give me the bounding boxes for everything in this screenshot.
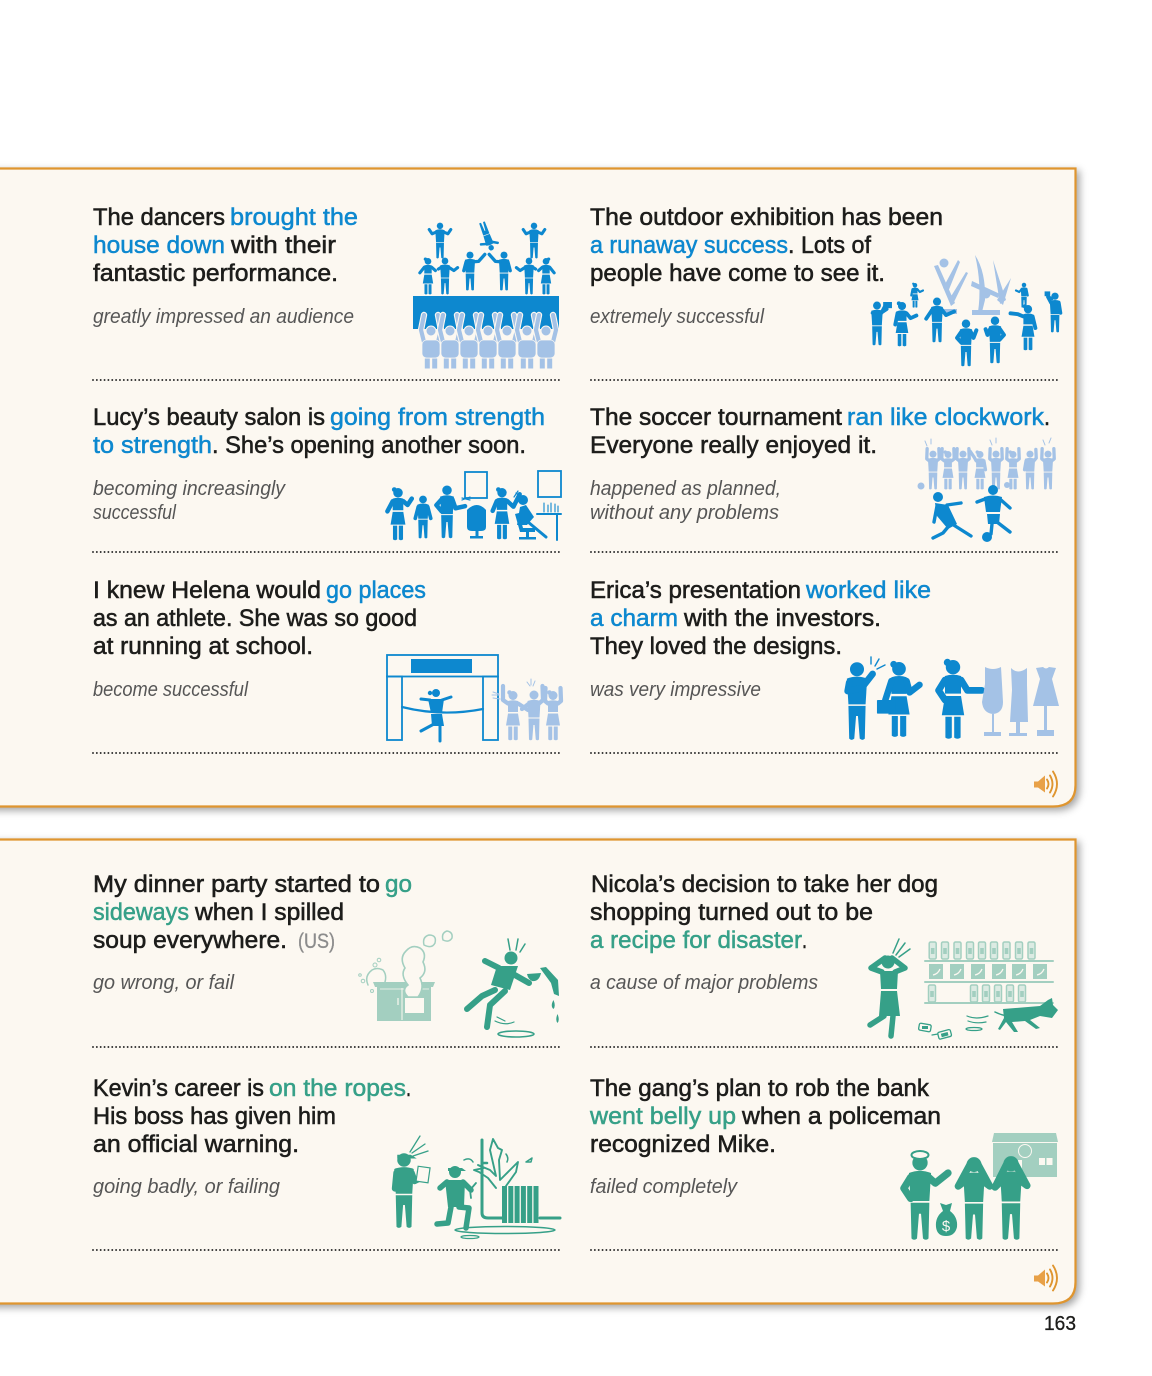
icon: inspector and plumber at a leaking radiator <box>394 1136 560 1238</box>
sentence: an official warning. <box>93 1131 299 1158</box>
icon: audio speaker <box>1034 1266 1057 1290</box>
definition: greatly impressed an audience <box>93 305 354 328</box>
sentence: people have come to see it. <box>590 260 885 287</box>
sentence: The soccer tournament <box>590 404 842 431</box>
panel: idioms about success <box>0 168 1076 806</box>
sentence: The gang’s plan to rob the bank <box>590 1075 930 1102</box>
definition: become successful <box>93 678 249 701</box>
sentence: ran like clockwork <box>847 404 1045 431</box>
sentence: Lucy’s beauty salon is <box>93 404 325 431</box>
sentence <box>93 871 412 954</box>
idiom: go sideways <box>93 871 559 1037</box>
definition: without any problems <box>590 501 779 524</box>
sentence: . <box>802 927 807 954</box>
sentence: fantastic performance. <box>93 260 338 287</box>
icon: supermarket shelves, dog and worried woman <box>870 939 1058 1039</box>
icon: soccer players and cheering fans <box>918 438 1054 542</box>
icon: dancers on stage with cheering audience <box>413 220 559 368</box>
sentence: . She’s opening another soon. <box>212 432 526 459</box>
sentence: as an athlete. She was so good <box>93 605 417 632</box>
definition: happened as planned, <box>590 477 781 500</box>
sentence: with their <box>230 232 336 259</box>
sentence: The outdoor exhibition has been <box>590 204 943 231</box>
panel background: success <box>0 168 1076 806</box>
sentence: go <box>385 871 412 898</box>
panel: idioms about failure <box>0 840 1076 1304</box>
definition: go wrong, or fail <box>93 971 235 994</box>
sentence: The dancers <box>93 204 225 231</box>
definition: extremely successful <box>590 305 765 328</box>
sentence: They loved the designs. <box>590 633 842 660</box>
sentence: (US) <box>298 930 335 953</box>
idiom: went belly up <box>589 1075 1058 1240</box>
icon: crowd around sculptures <box>871 255 1061 366</box>
sentence: at running at school. <box>93 633 313 660</box>
sentence: recognized Mike. <box>590 1131 776 1158</box>
sentence: soup everywhere. <box>93 927 287 954</box>
sentence <box>93 204 358 287</box>
sentence <box>93 1075 411 1158</box>
definition: becoming increasingly <box>93 477 287 500</box>
definition: was very impressive <box>590 678 761 701</box>
sentence: Erica’s presentation <box>590 577 801 604</box>
definition <box>590 477 781 524</box>
sentence <box>590 204 943 287</box>
sentence: . <box>1044 404 1050 431</box>
definition <box>93 477 287 524</box>
sentence: Everyone really enjoyed it. <box>590 432 877 459</box>
sentence: to strength <box>93 432 212 459</box>
sentence: when a policeman <box>741 1103 941 1130</box>
sentence: worked like <box>805 577 931 604</box>
sentence: went belly up <box>589 1103 736 1130</box>
sentence: a runaway success <box>590 232 788 259</box>
sentence: I knew Helena would <box>93 577 321 604</box>
idiom: worked like a charm <box>590 577 1059 740</box>
sentence <box>93 404 545 459</box>
sentence: . <box>406 1075 411 1102</box>
icon: bank, policeman, money bag and two robbers: $ <box>942 1218 951 1235</box>
idiom: a recipe for disaster <box>590 871 1058 1039</box>
icon: presenter and woman with dresses <box>847 657 1059 740</box>
sentence: with the investors. <box>683 605 881 632</box>
idiom: on the ropes <box>93 1075 560 1238</box>
icon: bank, policeman, money bag and two robbers <box>904 1133 1058 1240</box>
sentence <box>590 871 938 954</box>
definition: successful <box>93 501 177 524</box>
page number: 163 <box>1044 1313 1076 1335</box>
definition: failed completely <box>590 1175 739 1198</box>
sentence: a charm <box>590 605 678 632</box>
definition: going badly, or failing <box>93 1175 281 1198</box>
sentence: when I spilled <box>194 899 344 926</box>
sentence: . Lots of <box>788 232 871 259</box>
idiom: brought the house down <box>93 204 559 368</box>
sentence: Nicola’s decision to take her dog <box>591 871 938 898</box>
icon: smoking stove and falling man spilling soup <box>359 931 559 1037</box>
sentence: on the ropes <box>269 1075 406 1102</box>
idiom: go places <box>93 577 561 741</box>
sentence <box>590 577 931 660</box>
idiom: a runaway success <box>590 204 1061 366</box>
sentence: Kevin’s career is <box>93 1075 264 1102</box>
sentence: a recipe for disaster <box>590 927 802 954</box>
icon: runner crossing finish line <box>387 655 561 741</box>
sentence <box>93 577 426 660</box>
sentence <box>589 1075 941 1158</box>
sentence: going from strength <box>330 404 545 431</box>
sentence: sideways <box>93 899 189 926</box>
icon: audio speaker <box>1034 772 1057 796</box>
sentence: brought the <box>230 204 358 231</box>
sentence: His boss has given him <box>93 1103 336 1130</box>
sentence: house down <box>93 232 225 259</box>
sentence: My dinner party started to <box>93 871 380 898</box>
panel background: failure <box>0 840 1076 1304</box>
sentence: go places <box>326 577 426 604</box>
icon: busy beauty salon <box>387 471 561 540</box>
sentence <box>590 404 1050 459</box>
definition: a cause of major problems <box>590 971 818 994</box>
idiom: ran like clockwork <box>590 404 1054 542</box>
idiom: going from strength to strength <box>93 404 561 540</box>
sentence: shopping turned out to be <box>590 899 873 926</box>
